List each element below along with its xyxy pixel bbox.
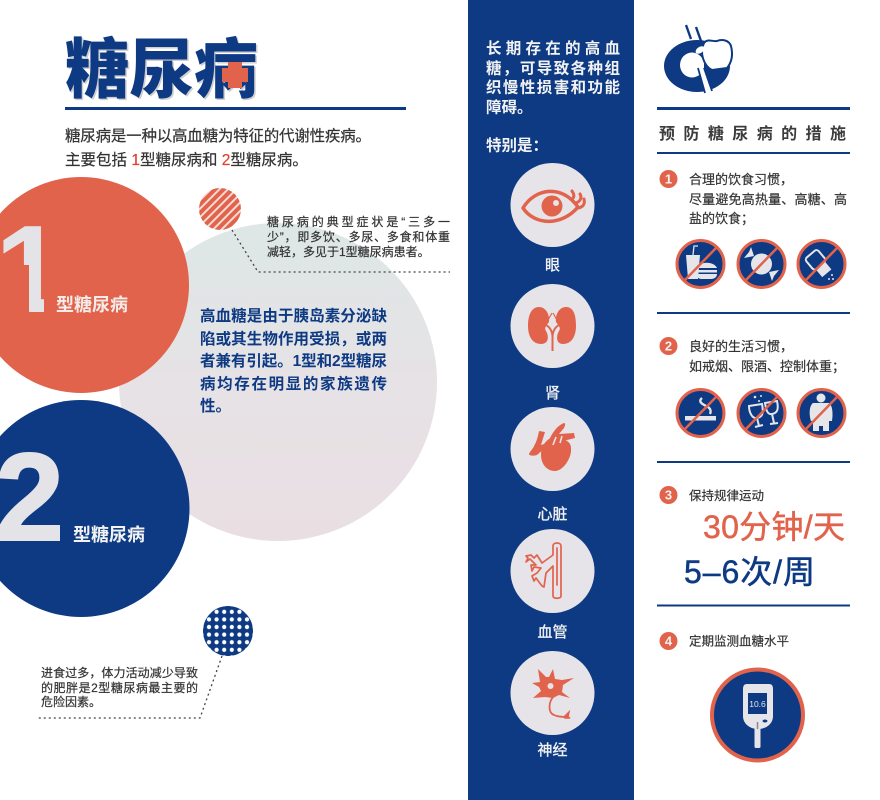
intro text: 糖尿病是一种以高血糖为特征的代谢性疾病。: [65, 127, 371, 145]
callout: typical symptoms: 糖尿病的典型症状是“三多一: [267, 214, 450, 229]
text: complications intro: [486, 38, 620, 154]
title: 糖尿病: 糖尿病: [65, 33, 258, 106]
callout: typical symptoms: 少”，即多饮、多尿、多食和体重: [267, 229, 450, 244]
stat: 5-6 times per week: 5–6次/周: [684, 554, 815, 590]
panel: type 2 circle: [0, 400, 190, 617]
icon: nerve cell: [510, 651, 594, 735]
label: heart: 心脏: [537, 506, 568, 523]
icon: dotted circle: [203, 606, 253, 656]
item 4: monitoring: 4: [665, 634, 673, 648]
icon: no candy: [738, 240, 785, 288]
item 1: diet: 合理的饮食习惯，: [689, 172, 793, 187]
icon: glucose meter: 10.6: [749, 699, 766, 709]
label: eye: 眼: [545, 257, 560, 274]
icon: no salt: [798, 240, 845, 288]
panel: type 2 circle: 型糖尿病: [73, 524, 145, 545]
item 3: exercise: 3: [665, 488, 672, 502]
icon: bowl and chopsticks: [664, 25, 732, 93]
text: hyperglycemia explanation: 高血糖是由于胰岛素分泌缺: [200, 306, 387, 325]
item 2: lifestyle: [660, 337, 845, 375]
item 4: monitoring: [660, 632, 789, 650]
text: complications intro: 糖，可导致各种组: [486, 58, 620, 78]
text: complications intro: 长期存在的高血: [486, 38, 620, 58]
intro text: [65, 127, 371, 169]
panel: complications column: [468, 0, 634, 800]
panel: type 1 circle: 型糖尿病: [56, 294, 128, 315]
text: complications intro: 障碍。: [486, 98, 533, 116]
item 3: exercise: [660, 486, 845, 590]
text: complications intro: 特别是：: [486, 136, 548, 154]
icon: kidney: [510, 284, 594, 368]
callout: risk factors: [38, 656, 222, 718]
icon: no obesity: [798, 390, 845, 436]
text: hyperglycemia explanation: 病均存在明显的家族遗传: [200, 374, 387, 393]
item 3: exercise: 保持规律运动: [689, 488, 764, 503]
intro text: 主要包括 1型糖尿病和 2型糖尿病。: [65, 151, 308, 169]
item 2: lifestyle: 如戒烟、限酒、控制体重；: [689, 359, 845, 375]
icon: glucose meter: [712, 670, 803, 760]
callout: risk factors: 危险因素。: [41, 694, 101, 709]
panel: type 1 circle: [0, 177, 189, 393]
icon: heart: [510, 407, 594, 491]
item 1: diet: [660, 170, 847, 227]
item 1: diet: 尽量避免高热量、高糖、高: [689, 192, 847, 207]
icon: no smoking: [677, 390, 724, 436]
icon: striped circle: [199, 188, 241, 230]
text: hyperglycemia explanation: 陷或其生物作用受损，或两: [200, 329, 387, 348]
callout: risk factors: 进食过多，体力活动减少导致: [41, 665, 198, 680]
rules: heading: [657, 107, 850, 606]
label: kidney: 肾: [545, 385, 560, 402]
callout: typical symptoms: 减轻，多见于1型糖尿病患者。: [267, 244, 430, 259]
item 4: monitoring: 定期监测血糖水平: [689, 634, 789, 648]
icon: no alcohol: [738, 390, 785, 436]
icon: no fast food: [677, 240, 724, 288]
item 1: diet: 盐的饮食；: [689, 211, 754, 227]
label: blood vessel: 血管: [537, 624, 568, 641]
item 2: lifestyle: 2: [665, 338, 672, 354]
icon: eye: [510, 163, 594, 247]
text: hyperglycemia explanation: 者兼有引起。1型和2型糖尿: [200, 351, 387, 370]
title: 糖尿病: 糖尿病: [66, 34, 260, 108]
text: complications intro: 织慢性损害和功能: [486, 78, 620, 96]
text: hyperglycemia explanation: [200, 306, 387, 415]
label: nerve: 神经: [537, 742, 568, 759]
text: hyperglycemia explanation: 性。: [200, 396, 231, 415]
icon: blood vessel: [510, 529, 594, 613]
heading: prevention: 预防糖尿病的措施: [659, 124, 846, 143]
pale background circle: [119, 223, 437, 541]
stat: 30 minutes per day: 30分钟/天: [703, 509, 845, 545]
item 2: lifestyle: 良好的生活习惯，: [689, 339, 793, 354]
item 1: diet: 1: [665, 172, 672, 186]
callout: risk factors: 的肥胖是2型糖尿病最主要的: [41, 680, 198, 695]
callout: typical symptoms: [232, 214, 450, 272]
